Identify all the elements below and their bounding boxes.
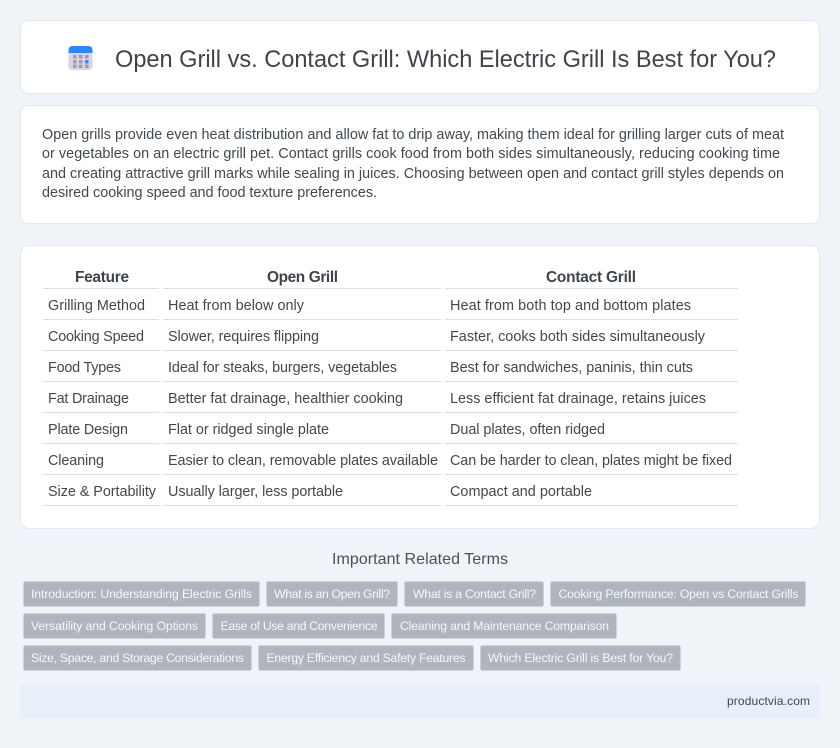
row: plate design: [48, 422, 605, 438]
tag: Which Electric Grill is Best for You?: [488, 651, 673, 665]
row: cleaning: Cleaning: [48, 453, 104, 469]
tag: [24, 646, 252, 670]
row: fat drainage: [48, 391, 706, 407]
tag: [258, 646, 474, 670]
row: plate design: Plate Design: [48, 422, 128, 438]
tag: [212, 614, 384, 638]
row: grilling method: Heat from both top and bottom plates: [450, 298, 691, 314]
footer: productvia.com: [727, 694, 810, 708]
row: size and portability: Usually larger, less portable: [168, 484, 343, 500]
row: fat drainage: Fat Drainage: [48, 391, 129, 407]
row: cleaning: Easier to clean, removable plates available: [168, 453, 438, 469]
tag: What is an Open Grill?: [274, 587, 390, 601]
tag: Cooking Performance: Open vs Contact Grills: [558, 587, 798, 601]
heading: related terms: Important Related Terms: [332, 551, 508, 568]
intro text: Open grills provide even heat distribution and allow fat to drip away, making them ideal for grilling larger cuts of meat: [42, 127, 784, 143]
intro text: desired cooking speed and food texture preferences.: [42, 185, 377, 201]
row: food types: Ideal for steaks, burgers, vegetables: [168, 360, 397, 376]
table header: Feature: [75, 269, 129, 286]
row: food types: Best for sandwiches, paninis, thin cuts: [450, 360, 693, 376]
tag: [480, 646, 680, 670]
table header: Contact Grill: [546, 269, 636, 286]
icon: calendar: [68, 46, 92, 70]
related terms tags: [24, 582, 806, 670]
intro text: [42, 127, 784, 201]
row: cooking speed: [48, 329, 706, 345]
row: food types: Food Types: [48, 360, 121, 376]
row: plate design: Flat or ridged single plate: [168, 422, 329, 438]
tag: Size, Space, and Storage Considerations: [31, 651, 244, 665]
panel: introduction: [20, 106, 820, 224]
tag: [392, 614, 616, 638]
row: size and portability: Size & Portability: [48, 484, 157, 500]
row: size and portability: [48, 484, 592, 500]
row: food types: [48, 360, 693, 376]
row: grilling method: Heat from below only: [168, 298, 305, 314]
footer: [20, 684, 820, 718]
table header: Open Grill: [267, 269, 338, 286]
tag: What is a Contact Grill?: [413, 587, 536, 601]
panel: header: [20, 20, 820, 94]
row: cooking speed: Faster, cooks both sides simultaneously: [450, 329, 706, 345]
tag: [24, 614, 206, 638]
row: cleaning: [48, 453, 732, 469]
table header: [75, 269, 636, 286]
panel: comparison table: [20, 246, 820, 528]
tag: Cleaning and Maintenance Comparison: [400, 619, 609, 633]
row: grilling method: [48, 298, 691, 314]
row: cooking speed: Cooking Speed: [48, 329, 144, 345]
tag: [550, 582, 806, 606]
tag: Versatility and Cooking Options: [31, 619, 198, 633]
row: grilling method: Grilling Method: [48, 298, 145, 314]
row: plate design: Dual plates, often ridged: [450, 422, 605, 438]
row: cooking speed: Slower, requires flipping: [168, 329, 319, 345]
tag: Energy Efficiency and Safety Features: [266, 651, 466, 665]
intro text: and creating attractive grill marks while sealing in juices. Choosing between open and contact grill styles depends on: [42, 166, 784, 182]
row: fat drainage: Less efficient fat drainage, retains juices: [450, 391, 706, 407]
tag: [266, 582, 398, 606]
tag: [24, 582, 260, 606]
title: Open Grill vs. Contact Grill: Which Electric Grill Is Best for You?: [115, 46, 776, 73]
intro text: or vegetables on an electric grill pet. Contact grills cook food from both sides simultaneously, reducing cooking time: [42, 146, 780, 162]
row: cleaning: Can be harder to clean, plates might be fixed: [450, 453, 732, 469]
tag: [404, 582, 544, 606]
row: size and portability: Compact and portable: [450, 484, 592, 500]
tag: Ease of Use and Convenience: [220, 619, 378, 633]
tag: Introduction: Understanding Electric Grills: [31, 587, 252, 601]
row: fat drainage: Better fat drainage, healthier cooking: [168, 391, 403, 407]
